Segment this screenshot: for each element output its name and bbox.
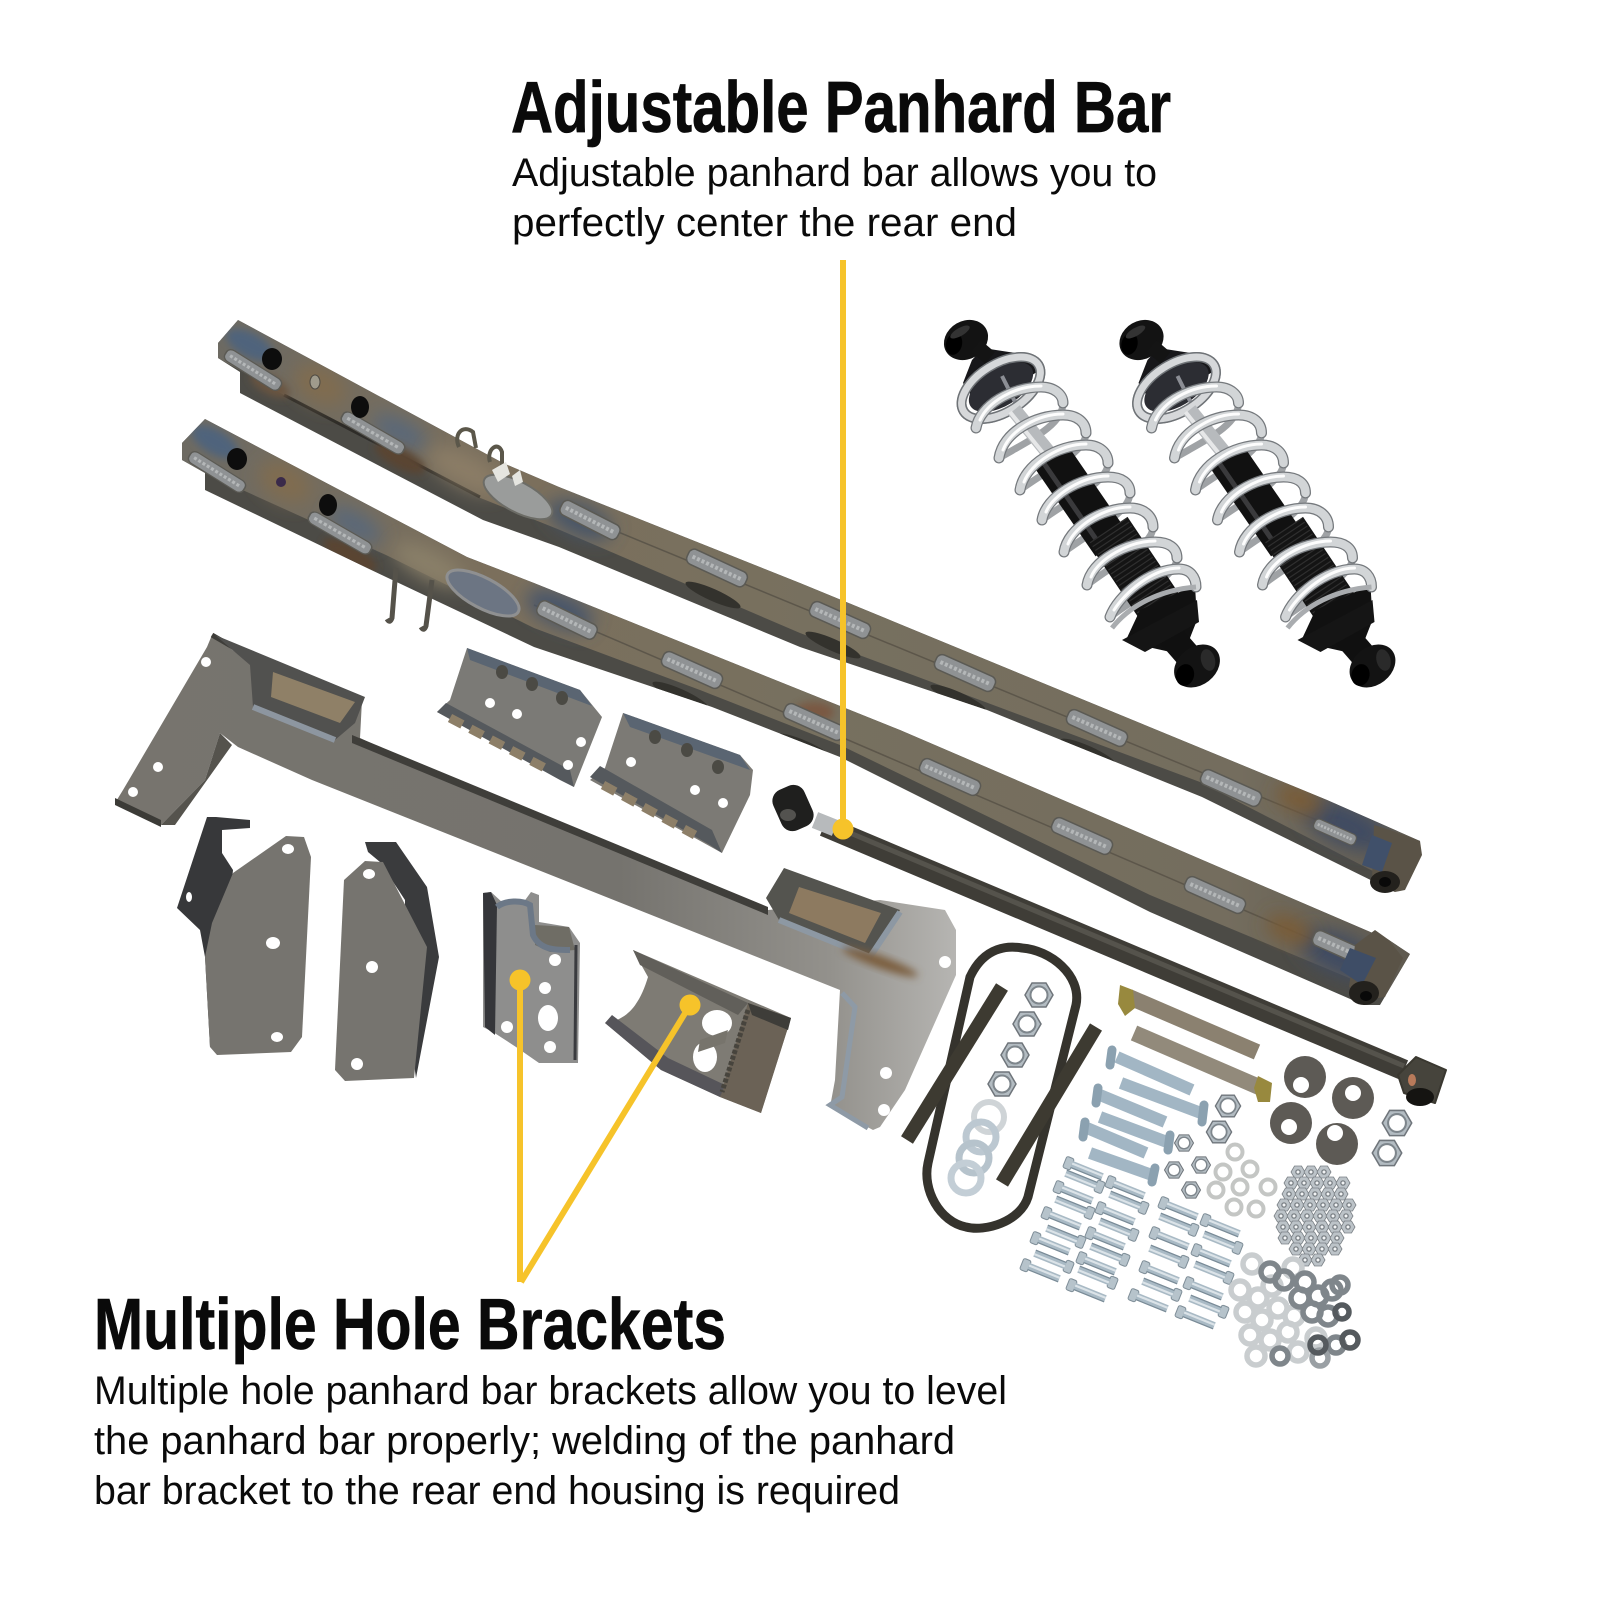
coilover shock B xyxy=(1112,312,1404,696)
shock plate D xyxy=(335,842,439,1081)
small washer cluster xyxy=(1231,1255,1358,1366)
crossmember holes xyxy=(128,657,951,1116)
left box mount xyxy=(215,635,365,740)
spring-perch bracket A xyxy=(437,648,602,787)
right flange xyxy=(830,993,868,1128)
U-bolt nuts and washers xyxy=(951,983,1053,1193)
text block: adjustable panhard bar description xyxy=(512,151,1157,245)
small bolts array xyxy=(1020,1156,1243,1331)
trailing arm rail: lower xyxy=(182,419,1410,1005)
U-bolt xyxy=(927,947,1077,1228)
panhard bar xyxy=(769,781,1446,1106)
rail 2 welds xyxy=(186,450,1375,969)
rail 2 end eye xyxy=(1340,930,1403,1005)
rail 1 welds xyxy=(222,348,1358,846)
multi-hole bracket E xyxy=(483,892,580,1063)
multi-hole bracket F xyxy=(605,950,791,1113)
long bolts: zinc xyxy=(1083,1050,1204,1182)
trailing arm rail: upper xyxy=(218,320,1422,893)
small nut cluster xyxy=(1274,1166,1356,1266)
heading: Multiple Hole Brackets: Multiple Hole Brackets xyxy=(94,1285,726,1365)
cam washers xyxy=(1270,1056,1374,1165)
rail 1 end eye xyxy=(1362,825,1422,893)
rail 1 holes and pin xyxy=(262,348,523,486)
text block: adjustable panhard bar description: Adjustable panhard bar allows you to xyxy=(512,151,1157,195)
shock plate C xyxy=(177,817,311,1055)
threaded rods xyxy=(907,987,1096,1183)
spring-perch bracket B xyxy=(590,713,753,853)
long bolts: bronze xyxy=(1118,985,1272,1102)
callout lines: multiple hole brackets xyxy=(510,970,700,1282)
medium nuts and small washers xyxy=(1164,1095,1276,1216)
left flange xyxy=(161,733,232,825)
text block: multiple hole brackets description: bar bracket to the rear end housing is required xyxy=(94,1469,900,1513)
top edge strip xyxy=(352,735,768,915)
text block: multiple hole brackets description: the panhard bar properly; welding of the panhard xyxy=(94,1419,955,1463)
lock nuts xyxy=(1372,1110,1412,1166)
coilover shock A xyxy=(937,312,1228,696)
text block: multiple hole brackets description xyxy=(94,1369,1007,1513)
right box mount xyxy=(766,868,920,981)
text block: multiple hole brackets description: Multiple hole panhard bar brackets allow you to level xyxy=(94,1369,1007,1413)
heading: Adjustable Panhard Bar: Adjustable Panhard Bar xyxy=(511,68,1171,148)
rail 2 holes and hooks xyxy=(227,448,432,629)
callout line: adjustable panhard bar xyxy=(832,260,854,840)
panhard left bushing xyxy=(769,781,835,835)
text block: adjustable panhard bar description: perfectly center the rear end xyxy=(512,201,1017,245)
panhard right eye xyxy=(1398,1057,1446,1106)
crossmember xyxy=(115,635,956,1130)
